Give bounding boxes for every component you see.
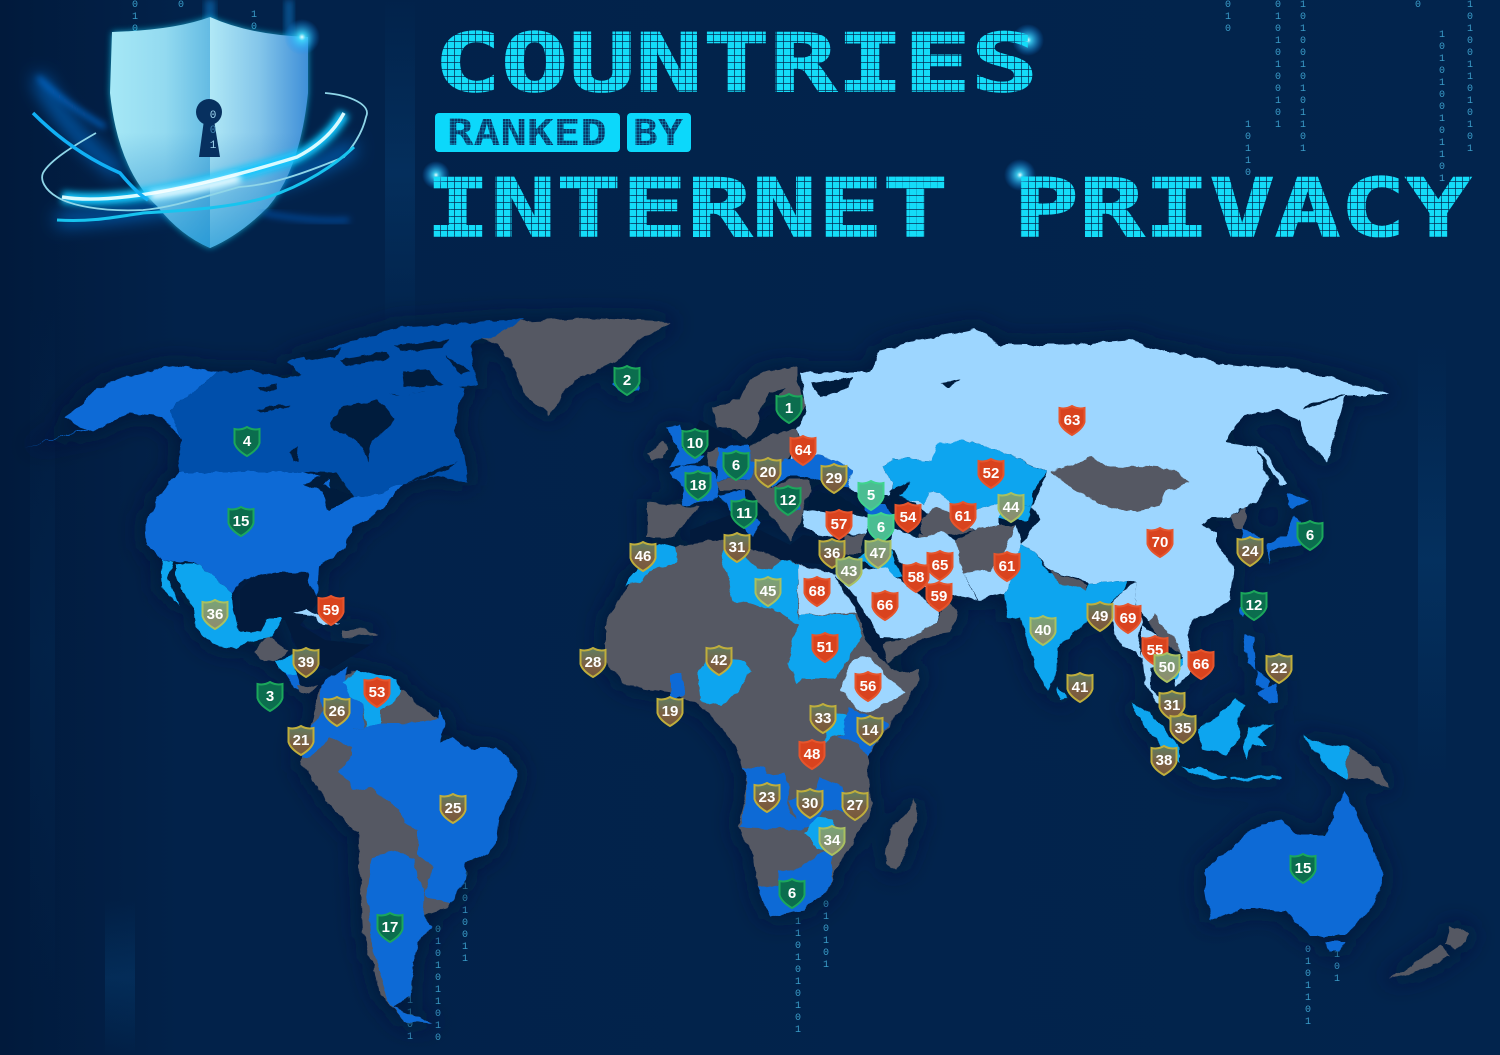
land: Venezuela	[343, 670, 400, 727]
land: Baltics and Poland	[745, 430, 800, 495]
land: Taiwan	[1239, 601, 1248, 616]
badge 58: 58	[908, 569, 924, 586]
badge 11: 11	[736, 505, 752, 522]
land: Colombia	[301, 668, 365, 757]
land: Kyrgyzstan	[1000, 503, 1032, 520]
badge 36	[202, 600, 228, 629]
badge 49	[1088, 602, 1112, 631]
land: Pakistan	[962, 525, 1020, 600]
badge 52: 52	[983, 465, 999, 482]
badge 43	[836, 557, 862, 586]
land: Zimbabwe	[803, 818, 843, 852]
badge 49: 49	[1092, 608, 1108, 625]
badge 42	[706, 646, 732, 675]
badge 1: 1	[785, 400, 793, 417]
badge 6: 6	[1306, 527, 1314, 544]
badge 6: 6	[877, 519, 885, 536]
badge 6	[868, 513, 894, 542]
background: 01010011	[460, 870, 470, 966]
land: Caucasus	[865, 505, 897, 520]
background: 10110101	[248, 10, 260, 106]
land: Borneo	[1197, 697, 1245, 755]
land: Angola	[740, 767, 805, 830]
badge 50	[1154, 653, 1180, 682]
land: Ireland	[648, 440, 668, 460]
land: Belarus	[790, 437, 817, 458]
badge 47	[866, 539, 890, 568]
badge 12: 12	[780, 492, 796, 509]
badge 36: 36	[207, 606, 223, 623]
badge 17: 17	[382, 919, 398, 936]
background: 010	[1222, 0, 1234, 36]
badge 70: 70	[1152, 534, 1168, 551]
background: 1010100101101	[1436, 30, 1448, 186]
title: INTERNET PRIVACY: INTERNET PRIVACY	[425, 162, 1471, 255]
icon: keyhole	[196, 99, 222, 157]
badge 65: 65	[932, 557, 948, 574]
badge 55: 55	[1147, 642, 1163, 659]
badge 45: 45	[760, 583, 776, 600]
land: Caribbean	[293, 609, 379, 638]
land: Balkans	[747, 480, 810, 540]
badge 5: 5	[867, 487, 875, 504]
badge 46	[630, 542, 656, 571]
badge 30	[798, 789, 822, 818]
badge 10: 10	[687, 435, 703, 452]
badge 40: 40	[1035, 622, 1051, 639]
land: Sumatra	[1132, 703, 1180, 763]
badge 34	[820, 826, 844, 855]
badge 57: 57	[831, 516, 847, 533]
badge 61	[994, 552, 1020, 581]
land: Brazil	[337, 710, 518, 903]
background: 1010010101101	[1298, 0, 1308, 156]
shield left half	[110, 17, 210, 248]
subtitle: RANKED BY: RANKED	[447, 113, 607, 154]
badge 4: 4	[243, 433, 252, 450]
land: Canada	[170, 320, 525, 497]
land: Korea	[1230, 507, 1260, 553]
title: COUNTRIES: COUNTRIES	[434, 17, 1038, 110]
world map	[23, 318, 1470, 1023]
land: Laos	[1147, 613, 1185, 657]
land: Philippines	[1243, 633, 1278, 703]
badge 41: 41	[1072, 679, 1088, 696]
badge 26: 26	[329, 703, 345, 720]
badge 40	[1030, 616, 1056, 645]
land: Syria	[845, 533, 867, 553]
land: Madagascar	[885, 798, 918, 870]
land: Spain	[647, 502, 700, 537]
badge 64	[790, 436, 816, 465]
land: Netherlands	[707, 447, 718, 467]
badge 70	[1148, 528, 1172, 557]
badge 34: 34	[824, 832, 841, 849]
badge 56	[856, 672, 880, 701]
badge 19: 19	[662, 703, 678, 720]
background: 0101101	[404, 960, 416, 1044]
badge 39: 39	[298, 654, 314, 671]
badge 66	[1188, 650, 1214, 679]
badge 6	[780, 879, 804, 908]
badge 42: 42	[711, 652, 727, 669]
land: South Africa	[758, 852, 833, 917]
badge 53	[364, 678, 390, 707]
glow star	[422, 161, 450, 189]
land: Japan	[1267, 493, 1308, 565]
land: Turkmenistan	[920, 507, 973, 537]
badge 22: 22	[1271, 660, 1287, 677]
badge 43: 43	[841, 563, 857, 580]
badge 6: 6	[732, 457, 740, 474]
land: Ukraine	[765, 455, 853, 490]
badge 38	[1152, 746, 1176, 775]
badge 2	[614, 366, 640, 395]
land: Iceland	[612, 376, 640, 394]
badge 17	[378, 913, 402, 942]
badge 12: 12	[1246, 597, 1262, 614]
land: Arabian Peninsula	[833, 567, 940, 638]
land: Sakhalin	[1257, 447, 1287, 485]
land: Nepal	[1050, 570, 1087, 590]
land: Uganda	[823, 712, 847, 745]
land: Argentina	[367, 852, 433, 1023]
land: Scandinavia	[713, 368, 808, 440]
land: Iran	[890, 528, 977, 600]
badge 48: 48	[804, 746, 820, 763]
land: Tasmania	[1325, 942, 1345, 952]
land: Ghana	[671, 674, 684, 700]
badge 20: 20	[760, 464, 776, 481]
badge 14: 14	[862, 722, 879, 739]
badge 54	[896, 503, 920, 532]
land: Central America	[254, 638, 318, 695]
badge 61: 61	[955, 508, 971, 525]
badge 46: 46	[635, 548, 651, 565]
badge 66: 66	[877, 597, 893, 614]
land: India	[1003, 543, 1127, 690]
land: Morocco	[625, 543, 678, 585]
shield illustration	[33, 17, 1044, 248]
badge 12	[1242, 591, 1266, 620]
badge 18: 18	[690, 477, 706, 494]
shield lower shade	[110, 17, 308, 248]
badge 27: 27	[847, 797, 863, 814]
badge 54: 54	[900, 509, 917, 526]
land: Kazakhstan	[882, 440, 1048, 510]
badge 28: 28	[585, 654, 601, 671]
rank badges	[202, 366, 1322, 942]
badge 31: 31	[1164, 697, 1180, 714]
badge 66: 66	[1193, 656, 1209, 673]
subtitle: RANKED BY	[435, 113, 691, 154]
land: Nigeria	[697, 658, 750, 706]
badge 24: 24	[1242, 543, 1259, 560]
subtitle: RANKED BY: BY	[633, 113, 683, 154]
badge 57	[826, 510, 852, 539]
land: Egypt	[798, 565, 857, 615]
land: Malaysia	[1160, 700, 1180, 728]
land: Central Asia	[910, 492, 1000, 530]
land: Thailand	[1142, 625, 1170, 705]
background: 0101011010	[432, 925, 444, 1045]
land: Turkey	[802, 510, 870, 537]
badge 56: 56	[860, 678, 876, 695]
badge 69: 69	[1120, 610, 1136, 627]
badge 22	[1266, 654, 1292, 683]
badge 63	[1060, 406, 1084, 435]
badge 59: 59	[931, 588, 947, 605]
land: Bulgaria and Serbia	[777, 490, 800, 510]
badge 29: 29	[826, 470, 842, 487]
badge 55	[1142, 636, 1168, 665]
land: New Guinea	[1302, 737, 1390, 788]
land: Afghanistan	[955, 525, 1015, 573]
shield right half	[210, 17, 308, 248]
badge 31: 31	[729, 539, 745, 556]
badge 29	[822, 464, 846, 493]
badge 5	[858, 481, 884, 510]
land: Mexico	[161, 560, 282, 650]
badge 63: 63	[1064, 412, 1080, 429]
badge 6	[724, 451, 748, 480]
land: UK	[665, 425, 705, 467]
badge 31	[724, 533, 750, 562]
badge 21	[288, 726, 314, 755]
badge 4	[234, 427, 260, 456]
badge 52	[978, 459, 1004, 488]
shield glow	[110, 17, 308, 248]
land: Sudan	[787, 615, 862, 683]
badge 59	[318, 596, 344, 625]
badge 31	[1160, 691, 1184, 720]
enclosed dark seas	[240, 420, 888, 670]
badge 47: 47	[870, 545, 886, 562]
land: Ethiopia	[840, 657, 905, 713]
badge 3: 3	[266, 688, 274, 705]
land: USA	[146, 472, 404, 597]
badge 35	[1170, 714, 1196, 743]
badge 15: 15	[1295, 860, 1311, 877]
badge 6	[1298, 521, 1322, 550]
badge 15	[228, 507, 254, 536]
land: Sulawesi	[1243, 725, 1273, 760]
land: Tunisia and Libya	[723, 537, 798, 625]
badge 21: 21	[293, 732, 309, 749]
badge 41	[1068, 673, 1092, 702]
badge 14	[858, 716, 882, 745]
glow star	[1012, 24, 1044, 56]
land: Cambodia	[1160, 657, 1183, 682]
badge 51: 51	[817, 639, 833, 656]
badge 20	[756, 458, 780, 487]
land: Alaska	[23, 366, 218, 447]
background: 0	[1412, 0, 1424, 12]
background: 01010100101	[1272, 0, 1284, 132]
badge 61: 61	[999, 558, 1015, 575]
badge 33	[810, 704, 836, 733]
ring glow	[38, 77, 354, 220]
badge 11	[732, 499, 756, 528]
land: Germany	[717, 445, 757, 480]
badge 39	[294, 648, 318, 677]
icon: keyhole: 0	[210, 125, 216, 137]
badge 64: 64	[795, 442, 812, 459]
badge 66	[872, 591, 898, 620]
badge 27	[842, 791, 868, 820]
land: Vietnam	[1160, 620, 1193, 687]
badge 25	[440, 794, 466, 823]
background: 0101101	[1302, 945, 1314, 1029]
badge 23	[754, 783, 780, 812]
glow star	[1004, 159, 1036, 191]
badge 30: 30	[802, 795, 818, 812]
badge 15	[1290, 854, 1316, 883]
land: Sri Lanka	[1058, 687, 1068, 700]
badge 53: 53	[369, 684, 385, 701]
land: Java and Lesser Sunda	[1180, 767, 1280, 781]
badge 45	[756, 577, 780, 606]
badge 59: 59	[323, 602, 339, 619]
land: Yemen and Oman	[883, 600, 958, 663]
badge 36	[820, 539, 844, 568]
land: Kenya	[837, 707, 890, 757]
badge 24	[1238, 537, 1262, 566]
background: 0101	[130, 0, 140, 48]
land: Kamchatka	[1297, 395, 1345, 462]
icon: keyhole: 1	[210, 140, 217, 152]
badge 51	[812, 633, 838, 662]
land: Myanmar	[1110, 583, 1143, 660]
badge 50: 50	[1159, 659, 1175, 676]
badge 44	[998, 493, 1024, 522]
background: 1010011010101	[1464, 0, 1476, 156]
land: Zambia	[790, 777, 848, 827]
land: Mongolia	[1052, 457, 1190, 512]
badge 18	[686, 471, 710, 500]
badge 26	[324, 697, 350, 726]
badge 33: 33	[815, 710, 831, 727]
background: 0	[176, 0, 186, 12]
water bodies	[257, 340, 1223, 612]
land: France	[670, 465, 720, 505]
badge 15: 15	[233, 513, 249, 530]
land: Russia and China	[797, 328, 1390, 623]
badge 19	[658, 697, 682, 726]
background: 010101	[820, 900, 832, 972]
background: 01101010101	[792, 905, 804, 1037]
land: Italy	[720, 490, 760, 537]
badge 44: 44	[1003, 499, 1020, 516]
land: Greenland	[482, 318, 670, 415]
badge 38: 38	[1156, 752, 1172, 769]
badge 68	[804, 577, 830, 606]
badge 68: 68	[809, 583, 825, 600]
badge 69	[1116, 604, 1140, 633]
badge 1	[776, 394, 802, 423]
badge 23: 23	[759, 789, 775, 806]
badge 35: 35	[1175, 720, 1191, 737]
badge 48	[800, 740, 824, 769]
badge 12	[776, 486, 800, 515]
badge 3	[258, 682, 282, 711]
badge 10	[682, 429, 708, 458]
badge 58	[904, 563, 928, 592]
background: 10110	[1242, 120, 1254, 180]
badge 59	[926, 582, 952, 611]
badge 61	[950, 502, 976, 531]
land: Africa base	[605, 540, 920, 917]
badge 36: 36	[824, 545, 840, 562]
land: Australia	[1205, 790, 1385, 935]
background: 101	[1332, 950, 1342, 986]
land: Alps	[717, 478, 760, 490]
glowing orbit rings	[33, 77, 367, 221]
badge 6: 6	[788, 885, 796, 902]
badge 2: 2	[623, 372, 631, 389]
badge 25: 25	[445, 800, 461, 817]
icon: keyhole: 0	[210, 110, 216, 122]
badge 28	[580, 648, 606, 677]
badge 65	[928, 551, 952, 580]
glow star	[284, 19, 320, 55]
land: New Zealand	[1390, 925, 1470, 980]
land: Iraq	[857, 547, 902, 577]
land: South America base	[302, 670, 450, 1023]
